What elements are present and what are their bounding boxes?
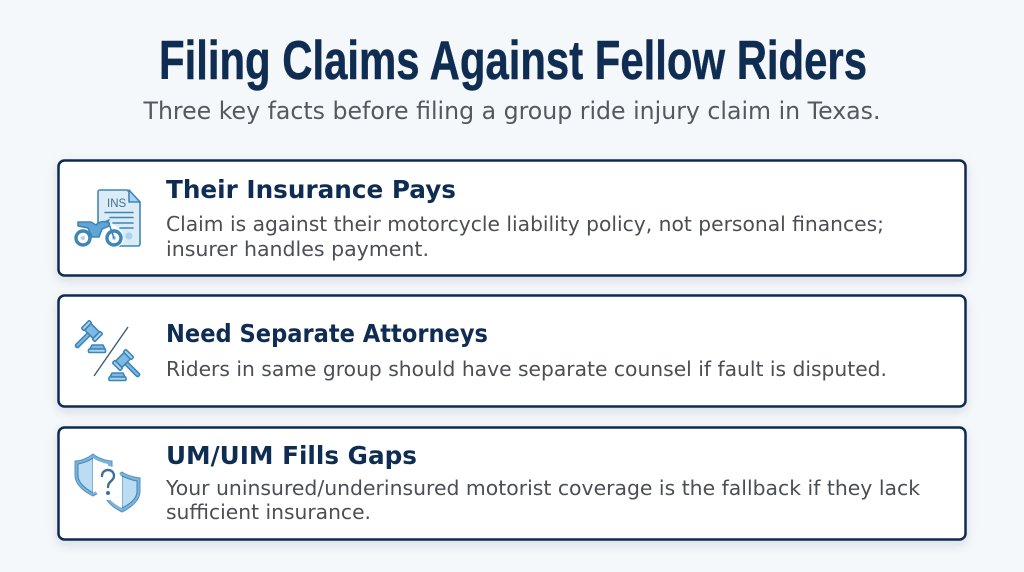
panel: their insurance pays: insurer handles payment.	[166, 237, 429, 261]
heading: Need Separate Attorneys	[166, 319, 488, 348]
icon: insurance document and motorcycle: INS	[107, 198, 126, 210]
heading: Their Insurance Pays	[166, 175, 456, 204]
subtitle: Three key facts before filing a group ride injury claim in Texas.	[143, 97, 880, 125]
text block: Riders in same group should have separate counsel if fault is disputed.	[166, 357, 887, 381]
heading: UM/UIM Fills Gaps	[166, 441, 417, 470]
icon: overlapping shields with question mark	[75, 454, 140, 512]
panel: UM/UIM fills gaps: sufficient insurance.	[166, 500, 371, 524]
icon: insurance document and motorcycle	[72, 190, 140, 249]
text block: Your uninsured/underinsured motorist coverage is the fallback if they lack	[165, 476, 920, 500]
panel: UM/UIM fills gaps	[58, 428, 966, 540]
icon: two gavels split by a slash	[69, 320, 146, 383]
panel: their insurance pays	[58, 160, 966, 276]
panel: need separate attorneys	[58, 296, 966, 406]
text block: Claim is against their motorcycle liability policy, not personal finances;	[166, 212, 884, 236]
